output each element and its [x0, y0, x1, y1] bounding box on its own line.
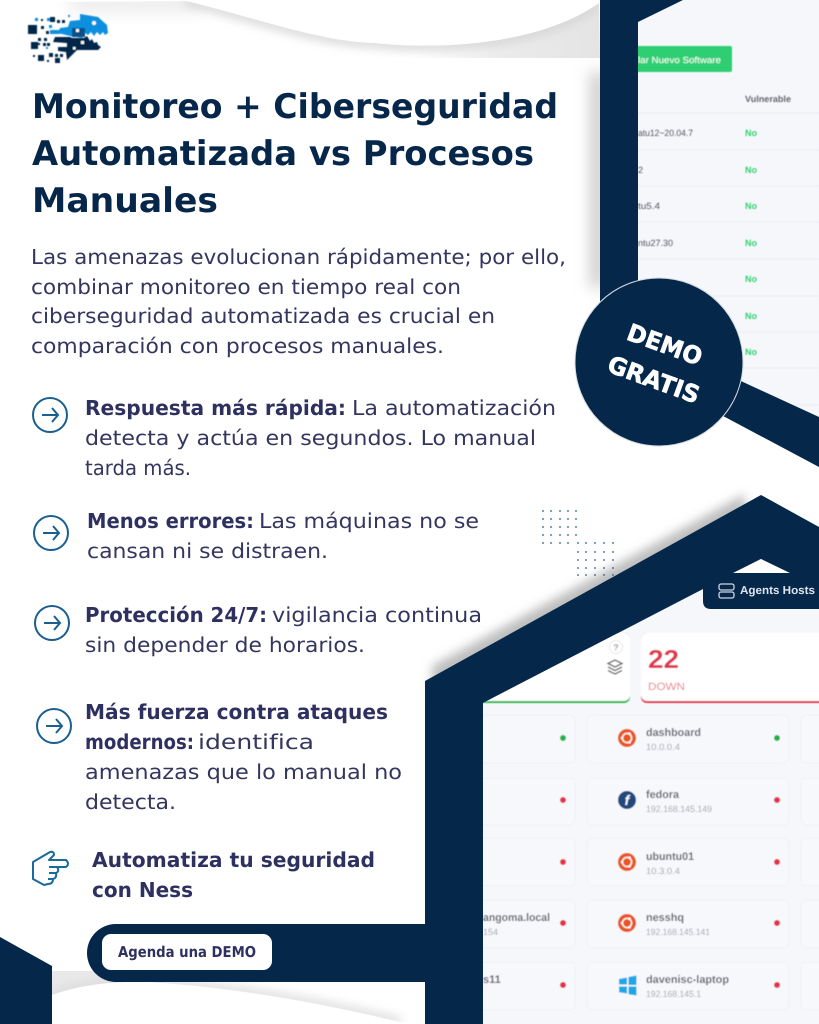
table contents: No [745, 238, 757, 248]
host: nesshq: nesshq [646, 912, 684, 924]
table contents: 2 [638, 165, 643, 175]
bullet: más fuerza: modernos: [85, 730, 194, 754]
table contents: No [745, 311, 757, 321]
bullet: más fuerza: amenazas que lo manual no [85, 760, 402, 784]
call to action text: Automatiza tu seguridad [92, 848, 375, 872]
bullet: respuesta más rápida [33, 396, 556, 480]
bullet: protección 24/7: vigilancia continua [272, 603, 482, 627]
host: nesshq [618, 912, 710, 937]
bullet: protección 24/7 [35, 603, 482, 657]
table contents: No [745, 347, 757, 357]
card: 22 down: 22 [648, 644, 679, 674]
white apex [733, 559, 790, 573]
intro paragraph: combinar monitoreo en tiempo real con [31, 275, 461, 299]
bullet: menos errores: Las máquinas no se [259, 509, 479, 533]
bullet: protección 24/7: Protección 24/7: [85, 603, 267, 627]
panel: agents hosts dashboard [425, 495, 819, 1024]
card: 22 down [641, 633, 819, 703]
host: fedora: 192.168.145.149 [646, 804, 712, 814]
bullet: protección 24/7: sin depender de horarios. [85, 633, 365, 657]
icon: arrow circle [33, 398, 67, 432]
title: Monitoreo + Ciberseguridad [32, 87, 558, 127]
host: dashboard: 10.0.0.4 [646, 742, 680, 752]
bullet: respuesta más rápida: detecta y actúa en segundos. Lo manual [85, 426, 536, 450]
bullet: respuesta más rápida: tarda más. [85, 456, 191, 480]
call to action text: con Ness [92, 878, 193, 902]
bullet: más fuerza: detecta. [85, 790, 176, 814]
logo: blue upper jaw [58, 14, 108, 38]
call to action text [92, 848, 375, 902]
bullet: menos errores [34, 509, 479, 563]
logo [28, 14, 108, 63]
bullet: más fuerza: identifica [198, 730, 314, 754]
table contents: No [745, 274, 757, 284]
shadow of top frame [592, 72, 604, 287]
host: dashboard: dashboard [646, 727, 701, 739]
intro paragraph: ciberseguridad automatizada es crucial en [31, 304, 495, 328]
table contents: No [745, 201, 757, 211]
bottom left navy shape [0, 937, 52, 1024]
table contents: Vulnerable [745, 94, 791, 104]
tab: agents hosts: Agents Hosts [740, 585, 815, 597]
badge: demo gratis: GRATIS [604, 350, 704, 410]
frame: lower diagonal band [700, 362, 819, 467]
logo: pixels [28, 17, 65, 63]
host: davenisc-laptop: davenisc-laptop [646, 974, 729, 986]
frame: navy house [425, 495, 819, 1024]
card: 22 down: DOWN [648, 681, 685, 693]
left column hosts [483, 912, 550, 986]
dashboard background [483, 559, 819, 1024]
bullet: menos errores: cansan ni se distraen. [87, 539, 328, 563]
host cards grid [483, 728, 781, 996]
frame: navy top and left band [600, 0, 683, 340]
badge: demo gratis: DEMO [623, 318, 706, 371]
intro paragraph: comparación con procesos manuales. [31, 334, 444, 358]
table contents: ntu27.30 [638, 238, 673, 248]
panel: software table [600, 0, 819, 467]
host: dashboard [618, 727, 701, 752]
background swoosh bottom [52, 971, 400, 1022]
left column hosts: s11 [483, 974, 501, 986]
button: agenda una demo: Agenda una DEMO [118, 943, 256, 961]
background swoosh top [70, 0, 600, 58]
table contents: tu5.4 [638, 201, 660, 211]
title: Automatizada vs Procesos [32, 134, 534, 174]
host: davenisc-laptop: 192.168.145.1 [646, 989, 701, 999]
decorative dots [542, 510, 614, 576]
host: davenisc-laptop [619, 974, 729, 999]
bullet: más fuerza [37, 700, 402, 814]
title [32, 87, 558, 221]
shadow of house frame [432, 494, 745, 690]
card: up: ? [613, 642, 619, 652]
badge: demo gratis [575, 278, 743, 446]
left column hosts: 154 [483, 927, 498, 937]
icon: pointing hand [33, 852, 68, 885]
host: ubuntu01: ubuntu01 [646, 851, 694, 863]
button: agenda una demo [87, 924, 426, 982]
card: up [470, 633, 630, 703]
bullet: respuesta más rápida: La automatización [352, 396, 556, 420]
table contents: atu12~20.04.7 [638, 128, 693, 138]
host: fedora: f [625, 792, 631, 808]
intro paragraph: Las amenazas evolucionan rápidamente; por ello, [31, 245, 566, 269]
icon: arrow circle [34, 516, 68, 550]
bullet: más fuerza: Más fuerza contra ataques [85, 700, 388, 724]
table contents [630, 46, 819, 405]
table contents: No [745, 165, 757, 175]
host: fedora [618, 789, 712, 814]
icon: arrow circle [37, 709, 71, 743]
host: ubuntu01: 10.3.0.4 [646, 866, 680, 876]
icon: arrow circle [35, 606, 69, 640]
status dots [560, 735, 780, 988]
logo: dark overlap [72, 28, 85, 37]
left column hosts: angoma.local [483, 912, 550, 924]
table background [638, 0, 819, 417]
bullet: menos errores: Menos errores: [87, 509, 254, 533]
table contents: lar Nuevo Software [638, 55, 721, 65]
table contents: No [745, 128, 757, 138]
intro paragraph [31, 245, 566, 358]
logo: eye dots [73, 21, 96, 50]
bullet: respuesta más rápida: Respuesta más rápida: [85, 396, 346, 420]
tab: agents hosts [703, 573, 819, 609]
host: fedora: fedora [646, 789, 680, 801]
host: nesshq: 192.168.145.141 [646, 927, 710, 937]
title: Manuales [32, 181, 218, 221]
logo: navy lower jaw [53, 36, 101, 60]
host: ubuntu01 [618, 851, 694, 876]
